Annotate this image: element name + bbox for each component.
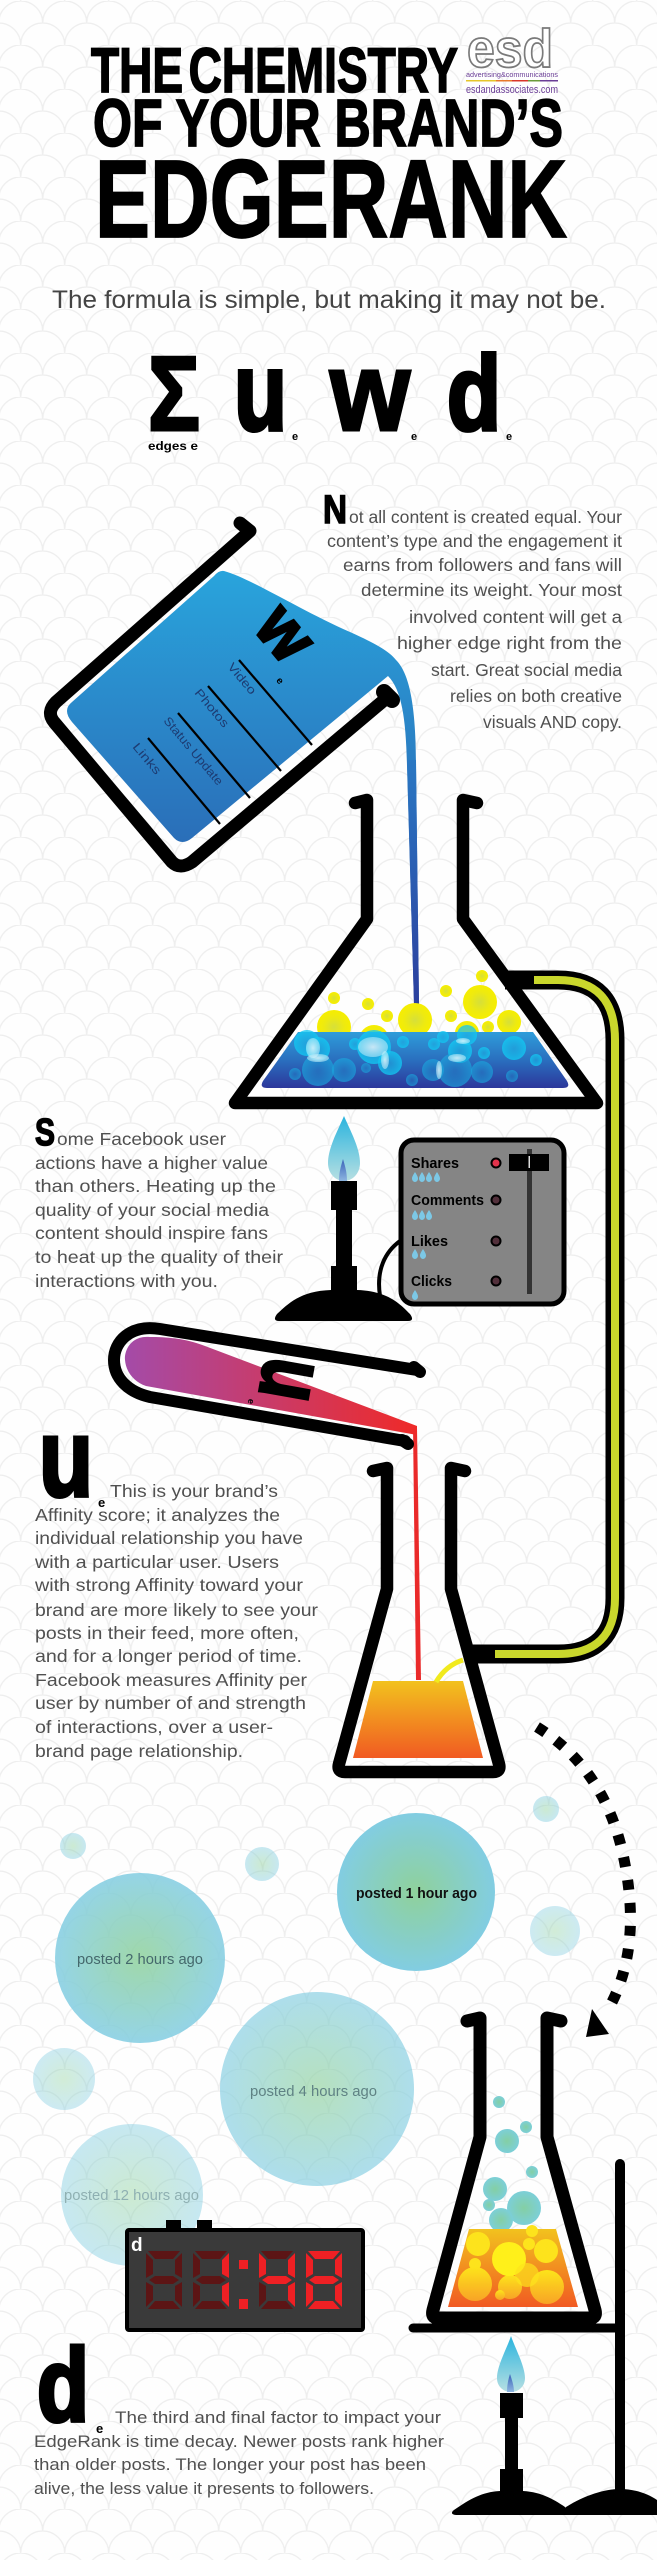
- text block: affinity: with strong Affinity toward your: [34, 1575, 303, 1595]
- flask: weight: [235, 800, 597, 1103]
- labels: Comments: [411, 1193, 484, 1209]
- text block: affinity: [34, 1397, 318, 1761]
- burner body: [452, 2393, 568, 2515]
- ring stand: [413, 2164, 657, 2515]
- text block: actions: interactions with you.: [35, 1271, 218, 1291]
- flask outline: [235, 800, 597, 1103]
- text block: affinity: of interactions, over a user-: [35, 1717, 273, 1737]
- text block: actions: [35, 1112, 283, 1291]
- burner: second: [452, 2336, 568, 2515]
- flask outline: [433, 2018, 595, 2318]
- text block: weight: relies on both creative: [450, 686, 622, 706]
- labels: Likes: [411, 1234, 448, 1250]
- text block: time decay: EdgeRank is time decay. Newer posts rank higher: [34, 2433, 445, 2451]
- formula: e: [292, 431, 298, 443]
- beaker letter w: e: [273, 675, 286, 687]
- formula: e: [411, 431, 417, 443]
- bubble: 12 hours: posted 12 hours ago: [64, 2187, 199, 2204]
- bubble: 1 hour: [337, 1813, 495, 1971]
- text block: time decay: [34, 2328, 445, 2498]
- bubble: 2 hours: [55, 1873, 225, 2043]
- cable: [379, 1241, 400, 1296]
- text block: time decay: than older posts. The longer your post has been: [34, 2456, 426, 2474]
- red stream: [413, 1426, 421, 1680]
- liquid: blue pour: [67, 571, 419, 1004]
- text block: weight: ot all content is created equal. Your: [349, 507, 622, 527]
- measure labels: Photos: [192, 686, 232, 730]
- panel: heat controls: [401, 1140, 564, 1304]
- arrow: dashed curve: [537, 1727, 630, 2037]
- title: [91, 36, 567, 261]
- text block: affinity: posts in their feed, more often,: [35, 1623, 299, 1643]
- formula: d: [447, 335, 501, 453]
- tube letter u: e: [246, 1398, 256, 1405]
- text block: actions: content should inspire fans: [35, 1223, 268, 1243]
- measure labels: Links: [130, 740, 164, 777]
- blue liquid: [262, 1032, 568, 1088]
- formula: [148, 330, 512, 454]
- bubble: 12 hours: [61, 2124, 203, 2266]
- tagline: The formula is simple, but making it may not be.: [52, 286, 606, 314]
- text block: affinity: with a particular user. Users: [34, 1552, 279, 1572]
- orange liquid: [448, 2229, 578, 2307]
- text block: affinity: user by number of and strength: [35, 1693, 306, 1713]
- text block: actions: quality of your social media: [35, 1200, 269, 1220]
- text block: weight: start. Great social media: [431, 660, 622, 680]
- burner body: [275, 1181, 412, 1321]
- liquid bubbles: [458, 2225, 564, 2304]
- bubble: 4 hours: [220, 1992, 414, 2186]
- formula: u: [234, 330, 287, 454]
- text block: affinity: u: [39, 1397, 93, 1520]
- tube outline: [114, 1328, 417, 1441]
- measure labels: Status Update: [161, 714, 226, 788]
- text block: actions: S: [35, 1112, 55, 1154]
- flask outline: [339, 1468, 499, 1772]
- text block: affinity: individual relationship you have: [35, 1528, 303, 1548]
- text block: weight: visuals AND copy.: [483, 712, 622, 732]
- text block: affinity: and for a longer period of time.: [35, 1646, 302, 1666]
- text block: affinity: Facebook measures Affinity per: [35, 1670, 307, 1690]
- beaker letter w: w: [240, 587, 333, 677]
- teal bubbles: [483, 2096, 541, 2232]
- text block: weight: determine its weight. Your most: [361, 580, 622, 600]
- bubble: 1 hour: posted 1 hour ago: [356, 1885, 477, 1902]
- burner: flame and stand: [275, 1116, 412, 1321]
- text block: affinity: e: [98, 1495, 105, 1510]
- text block: affinity: brand page relationship.: [35, 1741, 243, 1761]
- liquid bubbles: [289, 1025, 542, 1087]
- timer: digital clock: d: [131, 2235, 143, 2256]
- text block: actions: ome Facebook user: [57, 1129, 226, 1149]
- flask: decay: [433, 2018, 595, 2318]
- timer: digital clock: [127, 2220, 363, 2330]
- text block: weight: involved content will get a: [409, 607, 622, 627]
- text block: weight: content’s type and the engagement it: [327, 531, 622, 551]
- droplets: [412, 1172, 440, 1300]
- tube liquid: [125, 1337, 417, 1435]
- logo: esd: esd: [467, 19, 553, 79]
- tube letter u: u: [239, 1351, 347, 1410]
- text block: affinity: brand are more likely to see your: [35, 1600, 318, 1620]
- text block: time decay: d: [37, 2328, 89, 2444]
- text block: affinity: This is your brand’s: [110, 1481, 278, 1501]
- beaker outline: [50, 523, 389, 866]
- measure labels: [130, 660, 259, 788]
- test tube: u: [114, 1328, 421, 1680]
- formula: Σ: [148, 335, 200, 453]
- text block: time decay: alive, the less value it presents to followers.: [34, 2480, 374, 2498]
- indicator lights: [492, 1158, 500, 1286]
- formula: edges e: [148, 439, 198, 453]
- text block: time decay: The third and final factor to impact your: [115, 2409, 442, 2427]
- flame: [328, 1116, 360, 1181]
- bubble group: time decay: [33, 1796, 580, 2266]
- text block: actions: actions have a higher value: [35, 1153, 268, 1173]
- flame: [497, 2336, 525, 2392]
- logo: esd: advertising&communications: [466, 70, 558, 79]
- bubble: 2 hours: posted 2 hours ago: [77, 1951, 203, 1968]
- text block: weight: [323, 488, 622, 732]
- text block: weight: N: [323, 488, 347, 532]
- text block: weight: earns from followers and fans will: [343, 555, 622, 575]
- slider: [509, 1149, 549, 1294]
- formula: w: [329, 330, 411, 454]
- bubble: 4 hours: posted 4 hours ago: [250, 2083, 377, 2100]
- labels: Clicks: [411, 1274, 452, 1290]
- inner yellow tube: [436, 1660, 463, 1682]
- text block: affinity: Affinity score; it analyzes the: [35, 1505, 280, 1525]
- formula: e: [506, 431, 512, 443]
- beaker: w: [50, 523, 419, 1004]
- small bubbles: [33, 1796, 580, 2110]
- measure labels: Video: [225, 660, 259, 698]
- text block: actions: to heat up the quality of their: [35, 1247, 283, 1267]
- orange liquid: [353, 1681, 483, 1758]
- tube: yellow connector: [470, 980, 615, 1654]
- title: THE CHEMISTRY: [91, 36, 458, 106]
- labels: [411, 1156, 484, 1290]
- yellow bubbles: [317, 970, 521, 1055]
- measure lines: [148, 660, 312, 824]
- flask: affinity: [339, 1468, 499, 1772]
- text block: weight: higher edge right from the: [397, 633, 622, 653]
- text block: time decay: e: [96, 2421, 103, 2436]
- labels: Shares: [411, 1156, 459, 1172]
- text block: actions: than others. Heating up the: [35, 1176, 276, 1196]
- logo: esd: esdandassociates.com: [466, 84, 558, 96]
